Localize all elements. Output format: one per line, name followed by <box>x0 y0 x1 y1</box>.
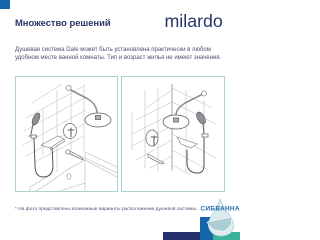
shower arm and rain head <box>66 86 111 127</box>
shelf <box>41 136 65 150</box>
logo: milardo: milardo <box>164 11 223 31</box>
corner accent <box>0 0 10 9</box>
footnote: * На фото представлены возможные варианты расположения душевой системы. <box>15 207 197 212</box>
description text: удобном месте ванной комнаты. Тип и возраст жилья не имеют значения. <box>15 54 221 60</box>
tile grid <box>132 84 216 175</box>
spout <box>66 150 83 160</box>
mixer <box>146 130 158 146</box>
drain <box>67 174 71 180</box>
shower arm and rain head <box>163 91 206 129</box>
brand name: СИБВАННА <box>200 206 240 212</box>
icon: bath in drop <box>208 199 234 236</box>
shelf <box>177 137 197 148</box>
mixer <box>64 124 76 138</box>
description text: Душевая система Dale может быть установлена практически в любом <box>15 47 211 53</box>
title: Множество решений <box>15 17 111 28</box>
hand shower and hose <box>29 112 53 177</box>
tile grid <box>23 84 84 172</box>
brand block: Сибванна <box>163 199 240 240</box>
bath edge <box>30 152 117 191</box>
description text <box>15 46 221 60</box>
panel: corner option <box>121 76 225 192</box>
hand shower and hose <box>187 111 208 173</box>
panel: wall-mounted option <box>15 76 118 192</box>
spout <box>148 154 164 164</box>
